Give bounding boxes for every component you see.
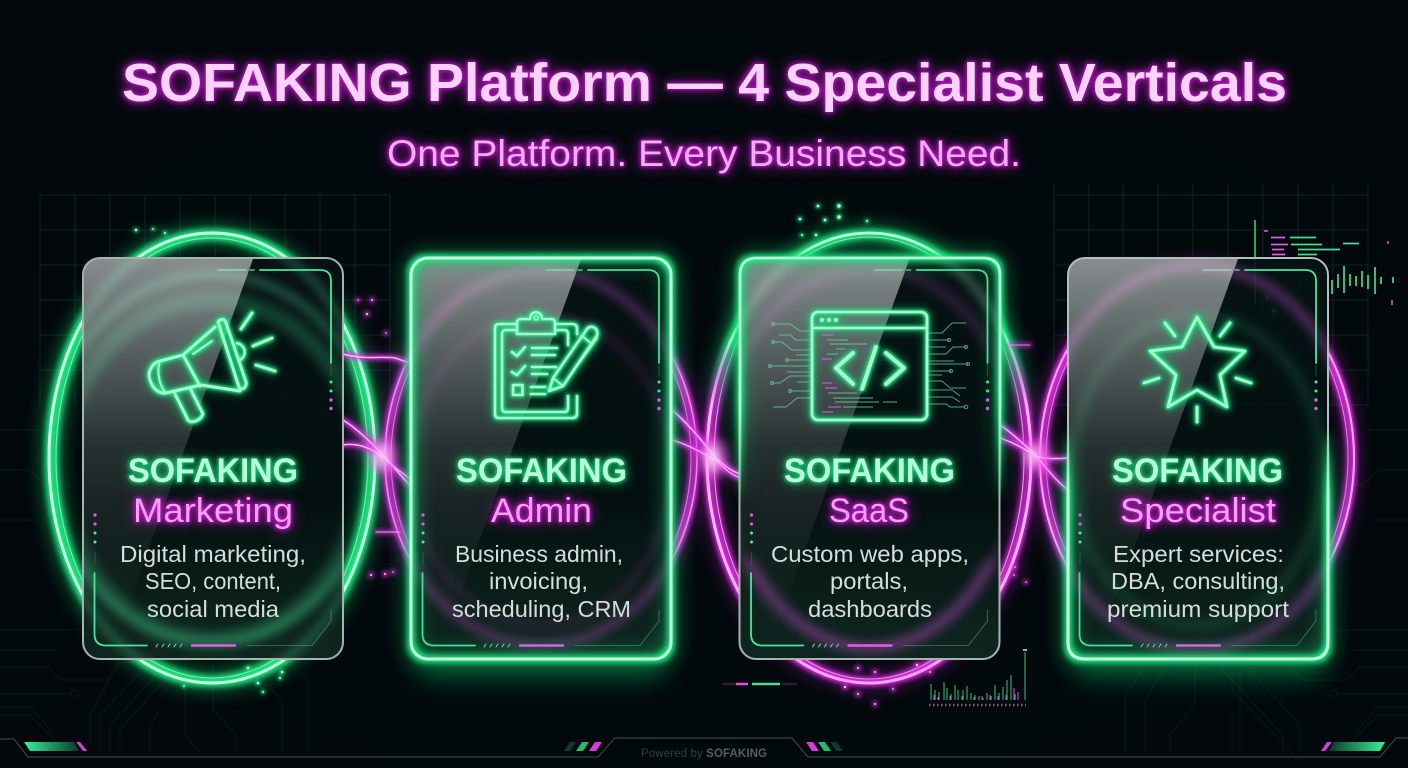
green halo under neon cards: [420, 657, 1320, 675]
footer frame: [0, 738, 1408, 757]
connector flares: [371, 438, 1050, 478]
card: SOFAKING Admin: [385, 258, 697, 659]
icon: star: [1144, 317, 1251, 422]
description: Admin: [452, 541, 631, 622]
circuit traces: [768, 322, 970, 409]
connector: Admin to SaaS: [672, 410, 741, 478]
inner glow arcs: Specialist: [1040, 266, 1354, 650]
description: Marketing: social media: [147, 596, 280, 622]
card: SOFAKING Marketing: [82, 257, 344, 660]
description: SaaS: Custom web apps,: [771, 541, 969, 567]
subheading: Marketing: Marketing: [133, 492, 293, 530]
subtitle: One Platform. Every Business Need.: [387, 133, 1021, 174]
glass glare and corner brackets: SaaS: [740, 259, 989, 647]
card body: Specialist: [1068, 258, 1328, 659]
ellipse ring: SaaS lower magenta: [695, 342, 1040, 698]
code lines: [822, 335, 897, 412]
description: Marketing: SEO, content,: [145, 568, 281, 594]
glowing ellipses behind cards: [49, 233, 1354, 683]
small status bar bottom-centre: [722, 683, 797, 685]
description: Admin: scheduling, CRM: [452, 596, 631, 622]
description: Admin: Business admin,: [455, 541, 623, 567]
ellipse ring: Admin: [370, 341, 705, 575]
description: SaaS: [771, 541, 969, 622]
description: Specialist: premium support: [1107, 596, 1289, 622]
subheading: Specialist: Specialist: [1120, 492, 1277, 530]
description: Specialist: DBA, consulting,: [1111, 568, 1285, 594]
inner glow arcs: Marketing: [84, 259, 342, 658]
description: Marketing: [120, 541, 306, 622]
icon: code window with circuit traces: [768, 312, 970, 420]
footer text: Powered by SOFAKING: [641, 748, 767, 760]
description: Marketing: Digital marketing,: [120, 541, 306, 567]
description: Specialist: [1107, 541, 1289, 622]
footer accent: right bar: [1321, 742, 1385, 751]
heading: SOFAKING Marketing: SOFAKING: [128, 452, 298, 490]
icon: clipboard: [495, 312, 597, 418]
background circuit traces: [0, 430, 1408, 760]
neon border: Admin: [411, 258, 671, 659]
ellipse ring: SaaS upper green: [702, 214, 1036, 408]
subheading: Admin: Admin: [491, 492, 592, 530]
icon: megaphone: [149, 313, 275, 422]
HUD: code lines and waveform top-right: [1255, 220, 1393, 305]
description: SaaS: dashboards: [808, 596, 932, 622]
neon lower border: Specialist: [1068, 430, 1328, 659]
background grid: left: [40, 195, 390, 405]
ellipse ring: Specialist: [1040, 266, 1354, 650]
window frame and code symbol: [812, 312, 927, 420]
card body: SaaS: [740, 258, 1000, 659]
heading: SOFAKING Specialist: SOFAKING: [1112, 452, 1283, 490]
connector: Marketing to Admin: [343, 354, 412, 532]
inner glow arcs: Admin: [413, 265, 669, 653]
card border: SaaS: [740, 258, 1000, 659]
particles: [135, 204, 1275, 693]
neon upper border: SaaS: [740, 258, 1000, 500]
glass glare and corner brackets: Admin: [412, 259, 661, 647]
card: SOFAKING Specialist: [1040, 258, 1354, 659]
ellipse ring: Marketing: [49, 233, 375, 683]
inner glow arcs: SaaS: [740, 260, 998, 658]
footer accent: centre-left chips: [564, 742, 602, 751]
heading: SOFAKING Admin: SOFAKING: [456, 452, 627, 490]
subheading: SaaS: SaaS: [829, 492, 909, 530]
description: Specialist: Expert services:: [1113, 541, 1284, 567]
description: SaaS: portals,: [830, 568, 908, 594]
description: Admin: invoicing,: [489, 568, 588, 594]
title: SOFAKING Platform — 4 Specialist Verticals: [122, 53, 1287, 113]
card body: Marketing: [83, 258, 343, 659]
glass glare and corner brackets: Marketing: [84, 259, 333, 647]
heading: SOFAKING SaaS: SOFAKING: [784, 452, 955, 490]
footer accent: left bar: [24, 742, 87, 751]
background grid: right: [1054, 185, 1368, 405]
footer accent: centre-right chips: [806, 742, 843, 751]
card body: Admin: [411, 258, 671, 659]
spectrum chart bottom-centre: [929, 650, 1027, 705]
card border: Marketing: [83, 258, 343, 659]
card: SOFAKING SaaS: [722, 240, 1019, 660]
connector: SaaS to Specialist: [1000, 345, 1068, 490]
card border: Specialist: [1068, 258, 1328, 659]
glass glare and corner brackets: Specialist: [1069, 259, 1318, 647]
